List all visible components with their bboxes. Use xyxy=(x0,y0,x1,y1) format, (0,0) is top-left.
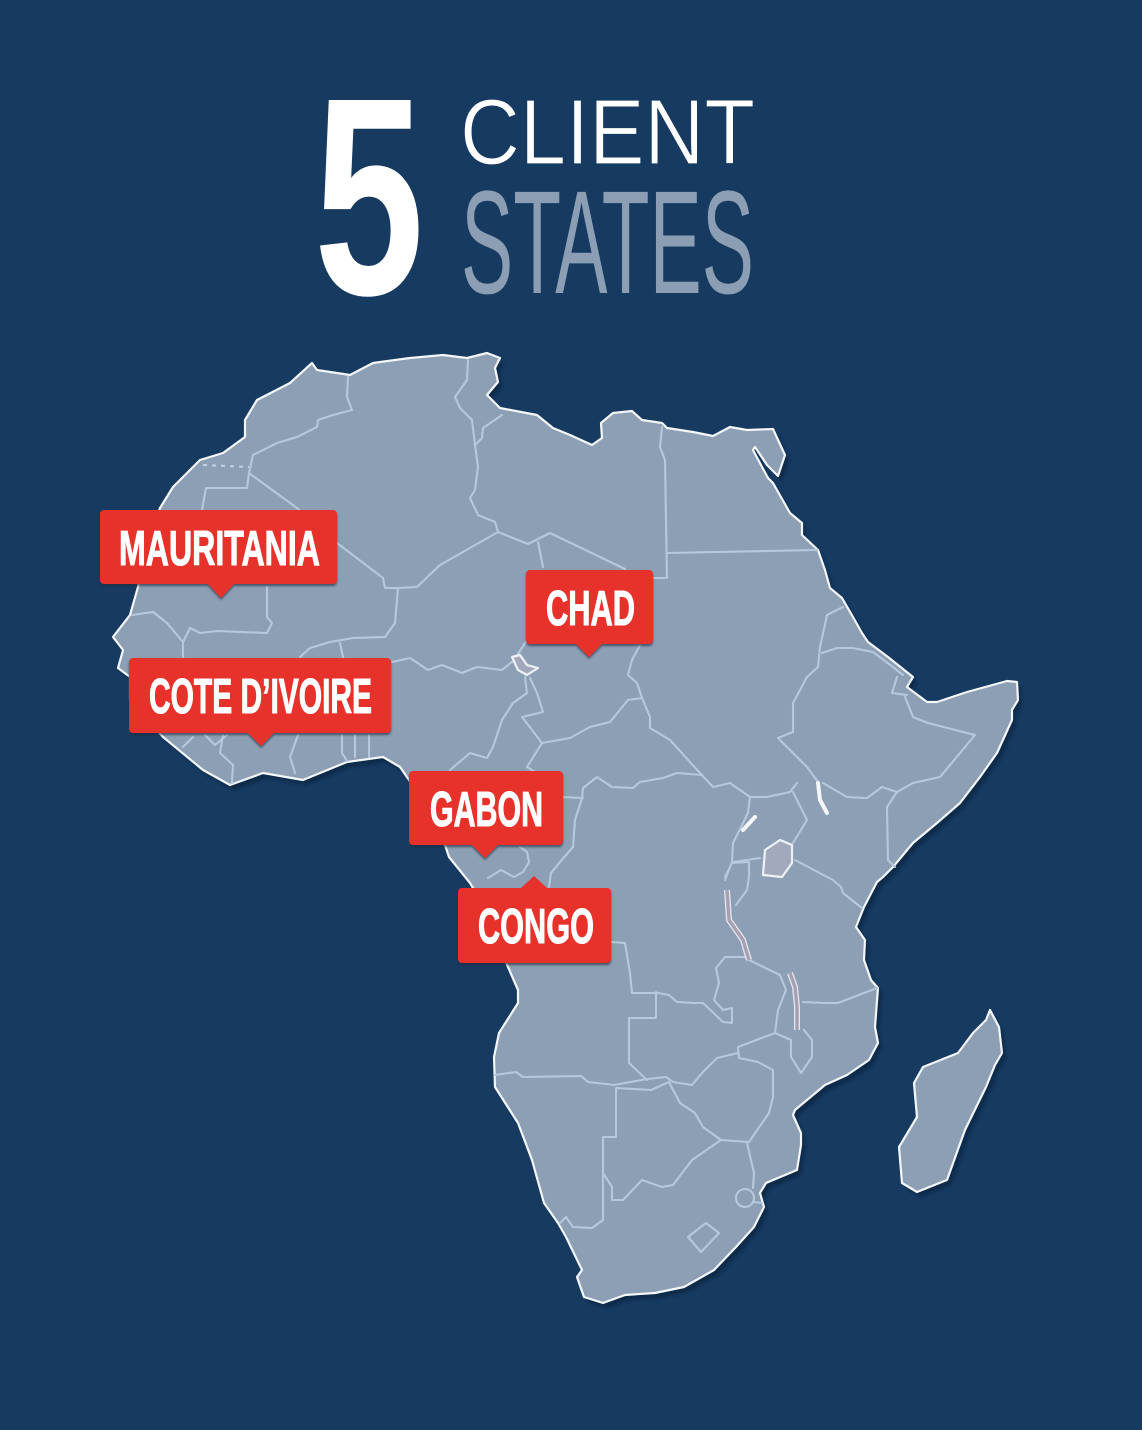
title word: CLIENT: CLIENT xyxy=(460,80,755,184)
map of Africa xyxy=(113,353,1022,1308)
map shadow xyxy=(117,358,1022,1308)
title word: STATES: STATES xyxy=(461,161,754,325)
label: Gabon: GABON xyxy=(430,783,543,837)
Lake Malawi xyxy=(790,973,797,1030)
label: Mauritania: MAURITANIA xyxy=(119,522,320,576)
Western Sahara dotted border xyxy=(203,465,249,467)
title numeral: 5: 5 xyxy=(314,39,424,354)
mainland Africa xyxy=(113,353,1018,1303)
label: Gabon xyxy=(409,771,563,858)
Lake Chad xyxy=(512,655,538,675)
Lake Albert xyxy=(743,817,755,830)
label: Cote d'Ivoire xyxy=(129,658,391,746)
label: Congo xyxy=(458,876,611,963)
label: Chad: CHAD xyxy=(546,582,635,636)
Lake Tanganyika xyxy=(727,890,749,960)
Lake Malawi fill xyxy=(790,973,797,1030)
label: Mauritania xyxy=(100,510,337,598)
Lake Tanganyika fill xyxy=(727,890,749,960)
country borders xyxy=(132,360,975,1252)
Lake Victoria xyxy=(763,840,792,877)
Madagascar xyxy=(899,1010,1002,1192)
label: Cote d'Ivoire: COTE D’IVOIRE xyxy=(149,670,372,724)
title xyxy=(314,39,755,354)
Lake Turkana xyxy=(818,783,827,813)
label: Chad xyxy=(526,570,653,657)
label: Congo: CONGO xyxy=(478,900,594,954)
